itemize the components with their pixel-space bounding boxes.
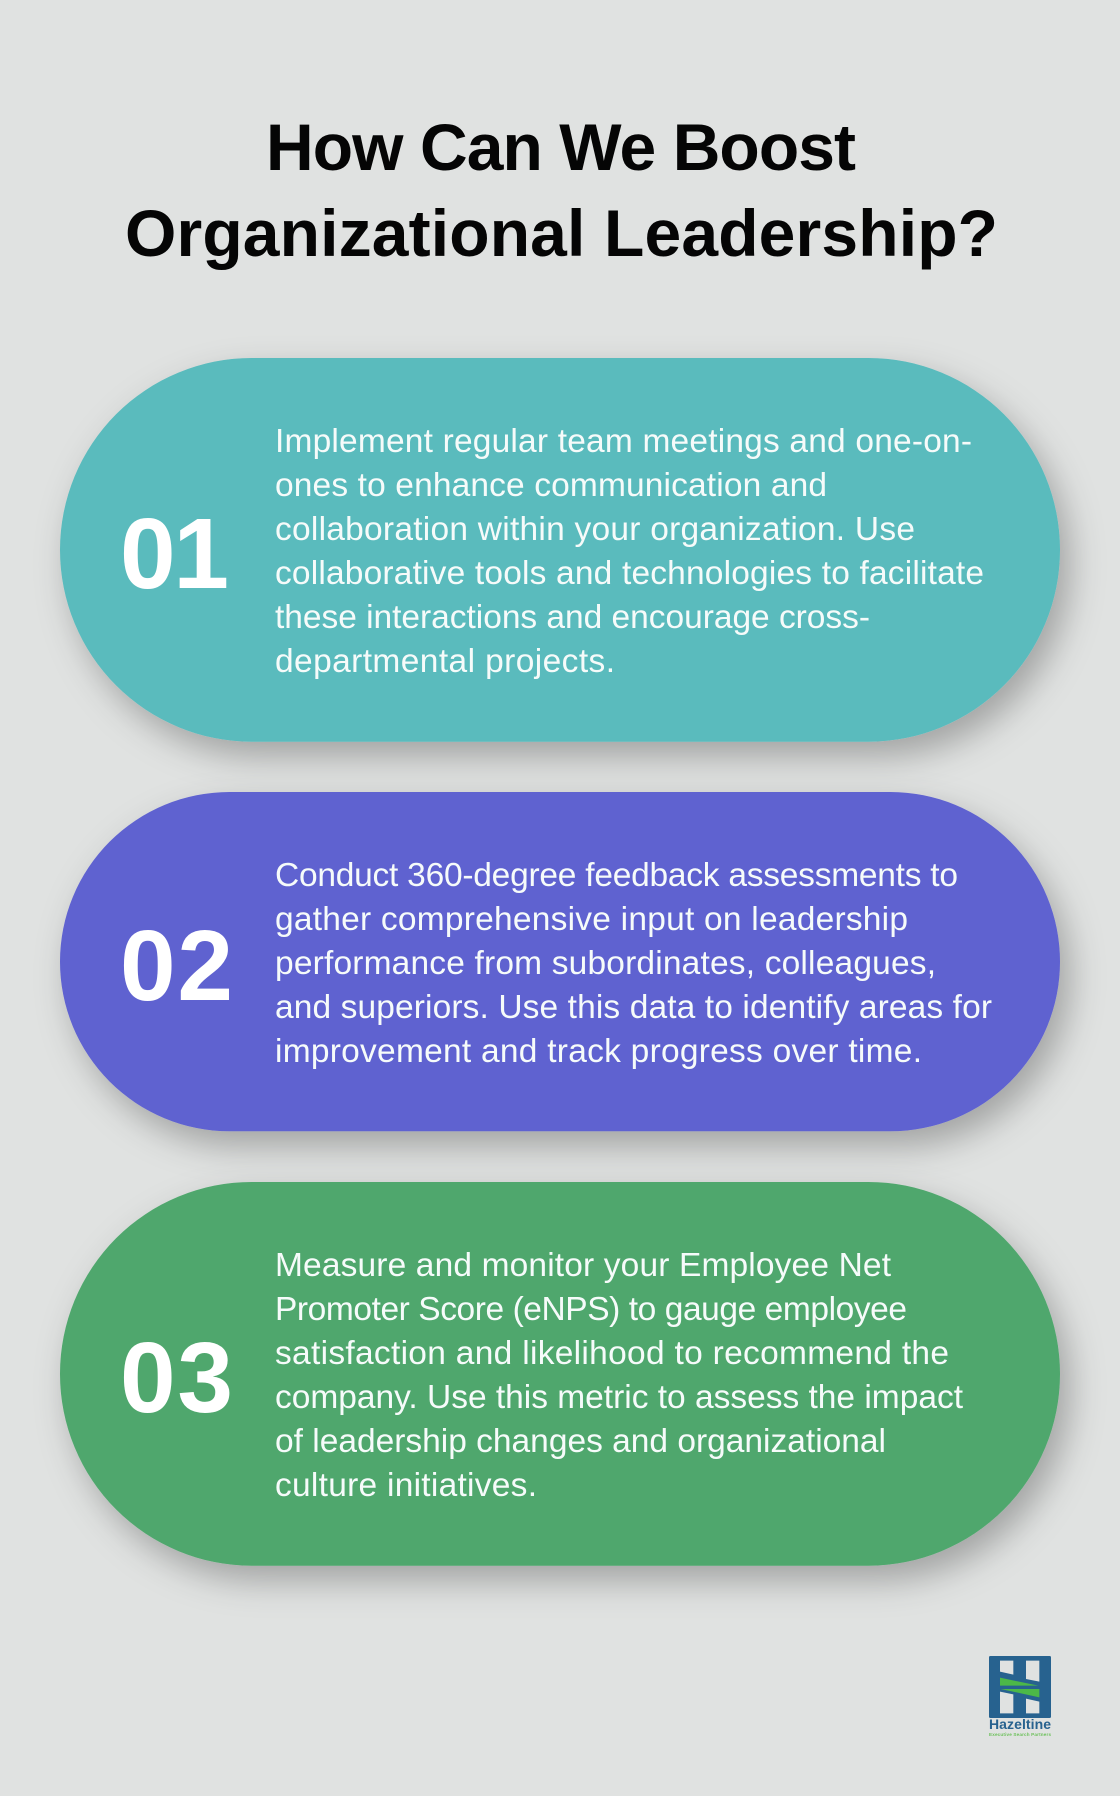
logo: Hazeltine Executive Search Partners: Hazeltine (989, 1716, 1051, 1732)
text block: step 02 (275, 857, 992, 1070)
logo: Hazeltine Executive Search Partners: Executive Search Partners (989, 1732, 1051, 1737)
text block: step 02: gather comprehensive input on leadership (275, 901, 908, 938)
text block: step 03: satisfaction and likelihood to recommend the (275, 1335, 949, 1372)
title: How Can We Boost (266, 110, 856, 184)
number 01: 01 (120, 498, 229, 610)
text block: step 03: Promoter Score (eNPS) to gauge employee (275, 1291, 907, 1328)
text block: step 02: performance from subordinates, colleagues, (275, 945, 936, 982)
title (125, 110, 998, 270)
title: Organizational Leadership? (125, 196, 998, 270)
text block: step 03: of leadership changes and organizational (275, 1423, 886, 1460)
number 03: 03 (120, 1322, 233, 1434)
text block: step 01: collaboration within your organization. Use (275, 511, 915, 548)
text block: step 02: Conduct 360-degree feedback assessments to (275, 857, 958, 894)
panel: step 03 (60, 1182, 1060, 1566)
text block: step 02: improvement and track progress over time. (275, 1033, 922, 1070)
number 02: 02 (120, 910, 233, 1022)
text block: step 03 (275, 1247, 964, 1504)
text block: step 02: and superiors. Use this data to identify areas for (275, 989, 992, 1026)
text block: step 03: Measure and monitor your Employee Net (275, 1247, 892, 1284)
panel: step 01 (60, 358, 1060, 742)
text block: step 01: collaborative tools and technologies to facilitate (275, 555, 984, 592)
text block: step 01: departmental projects. (275, 643, 615, 680)
text block: step 03: culture initiatives. (275, 1467, 537, 1504)
logo: Hazeltine Executive Search Partners (989, 1656, 1051, 1737)
panel: step 02 (60, 792, 1060, 1131)
text block: step 01: Implement regular team meetings and one-on- (275, 423, 972, 460)
text block: step 03: company. Use this metric to assess the impact (275, 1379, 964, 1416)
text block: step 01 (275, 423, 984, 680)
text block: step 01: these interactions and encourage cross- (275, 599, 870, 636)
text block: step 01: ones to enhance communication and (275, 467, 827, 504)
